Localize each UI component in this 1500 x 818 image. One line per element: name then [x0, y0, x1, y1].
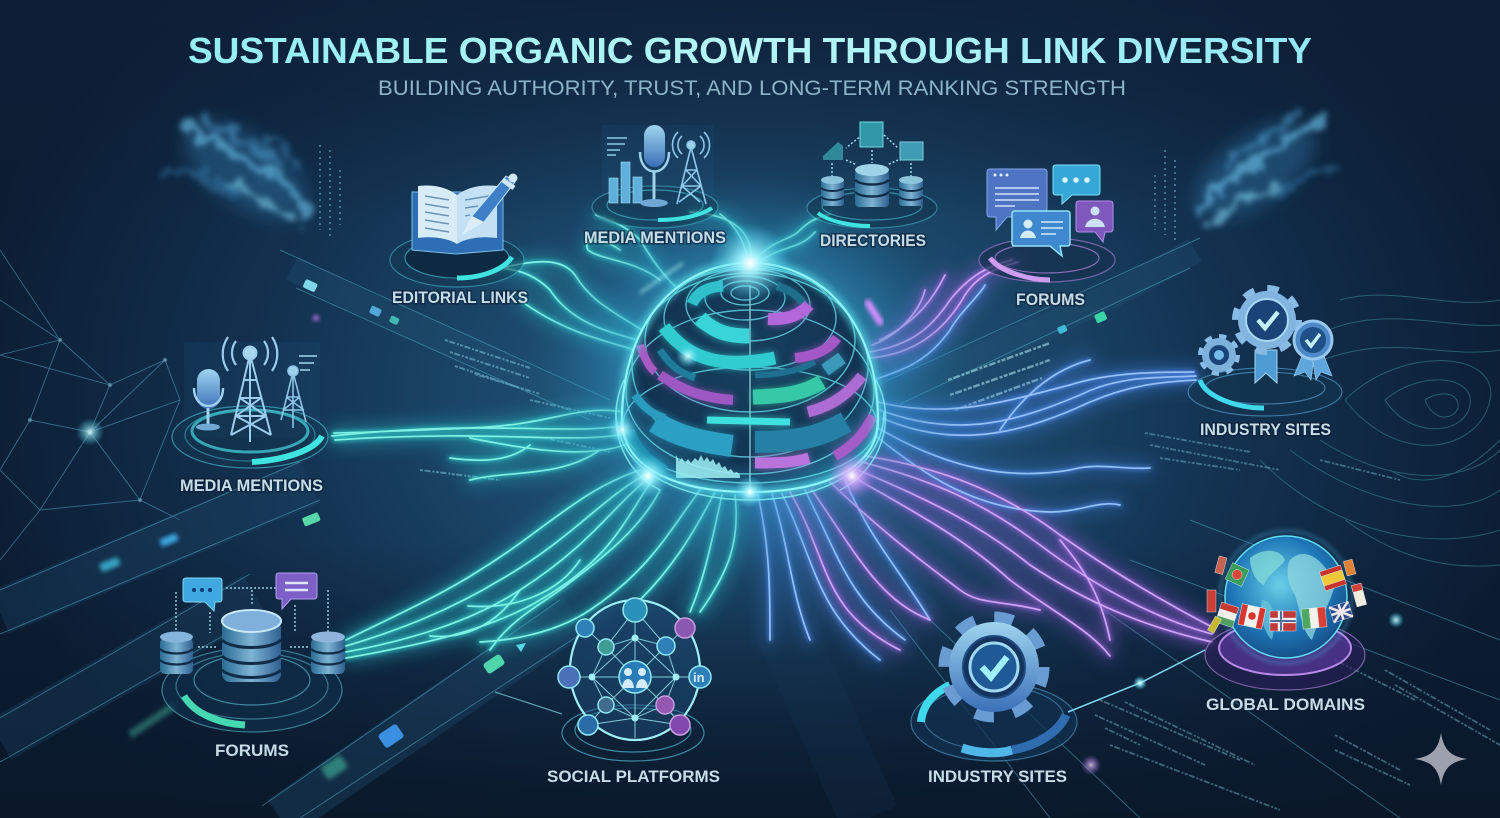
left side flare: [606, 414, 638, 446]
flag: uk: [1329, 601, 1353, 623]
label: INDUSTRY SITES: [928, 767, 1067, 786]
network hub glow: [76, 418, 104, 446]
sphere halo: [525, 175, 975, 575]
icon: small tower: [281, 366, 306, 428]
icon: purple bubble: [1076, 201, 1113, 242]
icon: database right: [899, 176, 923, 206]
node: social platforms: [547, 598, 720, 786]
node: media mentions top: [584, 125, 726, 247]
icon: bar chart: [609, 162, 642, 203]
icon: file tile: [860, 122, 883, 147]
highlight flare: [676, 344, 700, 368]
purple spark: [868, 303, 880, 322]
flag: left edge: [1207, 590, 1216, 612]
label: MEDIA MENTIONS: [180, 476, 323, 495]
network graph: left edge: [0, 250, 180, 560]
glow point: right: [1388, 612, 1404, 628]
icon: text lines: [607, 138, 627, 155]
flag: lower left: [1208, 616, 1222, 633]
node: industry sites bottom: [911, 620, 1077, 786]
latitude rings: [623, 266, 877, 492]
code text lines: right block: [948, 343, 1050, 410]
icon: microphone: [194, 369, 223, 430]
flag: norway: [1270, 611, 1296, 631]
icon: gear: [947, 620, 1041, 714]
node ring: [592, 186, 718, 228]
label: MEDIA MENTIONS: [584, 228, 726, 247]
node: industry sites right: [1188, 290, 1342, 439]
icon: profile bubble: [1012, 211, 1070, 256]
icon: database centre: [855, 164, 889, 207]
dotted connectors: [832, 135, 911, 176]
icon: text lines: [299, 356, 317, 370]
node ring: [162, 648, 342, 732]
node: media mentions left: [172, 337, 328, 495]
connector: gear to globe: [1068, 650, 1205, 712]
sphere panels glow: [630, 286, 873, 470]
node backdrop: [184, 342, 320, 437]
link tendrils: crisp strands: [332, 212, 1212, 660]
title: SUSTAINABLE ORGANIC GROWTH THROUGH LINK DIVERSITY: [188, 30, 1312, 71]
people icon: [622, 679, 648, 688]
sphere body: [622, 263, 878, 492]
dotted connectors: [176, 588, 328, 647]
icon: database left: [160, 632, 193, 674]
flag: italy: [1301, 607, 1327, 629]
link tendrils: wide glow: [332, 212, 1212, 660]
icon: database centre: [222, 610, 281, 682]
node: editorial links: [390, 174, 528, 307]
road bands: [0, 238, 1500, 818]
icon: big gear: [1237, 290, 1297, 350]
label: SOCIAL PLATFORMS: [547, 767, 720, 786]
icon: badge: [1294, 321, 1332, 359]
code text lines: left block: [420, 340, 610, 480]
icon: fountain pen: [462, 174, 518, 235]
globe: [1220, 531, 1352, 663]
node ring: [1188, 368, 1342, 416]
flag: upper right: [1343, 559, 1356, 576]
node: global domains: [1205, 531, 1367, 714]
data dots: right: [1155, 150, 1175, 240]
bottom node flare: [734, 476, 766, 508]
flag: upper left: [1215, 556, 1227, 574]
road markers: [99, 279, 1108, 780]
node ring: [979, 238, 1115, 282]
connector: road to social: [495, 692, 562, 714]
light ray: [640, 263, 683, 293]
link tendrils: soft halo: [332, 212, 1212, 660]
data dots: left: [320, 145, 340, 240]
flag: spain: [1319, 565, 1347, 591]
icon: cyan bubble: [1053, 165, 1100, 204]
node backdrop: [602, 125, 714, 205]
glow point: bottom: [1081, 755, 1101, 775]
node: directories: [807, 122, 937, 250]
sphere rim glow: [622, 263, 878, 492]
icon: main tower: [223, 337, 277, 442]
smoke cloud: top right: [1178, 102, 1335, 238]
node ring: [807, 188, 937, 228]
label: FORUMS: [1016, 290, 1085, 309]
node ring: [1205, 620, 1365, 690]
flags: [1207, 556, 1367, 633]
icon: microphone: [640, 125, 669, 207]
ribbons: badge: [1294, 356, 1332, 380]
icon: open book: [412, 185, 503, 254]
code text lines: lower right: [1095, 433, 1500, 810]
central data sphere: [544, 197, 958, 562]
sphere mini chart: [676, 455, 740, 478]
top light flare: [710, 223, 790, 303]
node ring: [172, 406, 328, 468]
flag: hungary: [1215, 602, 1239, 628]
network sphere: [569, 600, 700, 740]
right node flare: [828, 452, 876, 500]
icon: folder tile: [900, 142, 923, 160]
network nodes: [558, 598, 711, 735]
flag: canada: [1238, 604, 1266, 629]
icon: window bubble: [987, 169, 1047, 230]
smoke cloud: top left: [168, 102, 322, 238]
label: DIRECTORIES: [820, 231, 926, 250]
icon: purple bubble: [276, 573, 317, 609]
label: EDITORIAL LINKS: [392, 288, 528, 307]
icon: link tile: [823, 142, 843, 160]
subtitle: BUILDING AUTHORITY, TRUST, AND LONG-TERM RANKING STRENGTH: [378, 77, 1126, 100]
heads: [624, 668, 646, 676]
node ring: [390, 233, 524, 287]
sphere rim: [622, 263, 878, 492]
icon: small gear: [1201, 337, 1237, 373]
icon: radio tower: [672, 132, 710, 204]
label: FORUMS: [215, 741, 289, 760]
sphere base rings: [616, 380, 885, 500]
node: forums bottom: [160, 573, 345, 760]
flag: bangladesh: [1225, 563, 1249, 587]
flag: right edge: [1351, 583, 1367, 607]
icon: database left: [821, 176, 844, 206]
sphere data panels: [630, 286, 873, 470]
left node flare: [626, 454, 670, 498]
node: forums top: [979, 165, 1115, 309]
node ring: [562, 705, 704, 761]
node ring: [911, 683, 1077, 761]
watermark star: [1415, 733, 1467, 785]
topographic lines: right edge: [1260, 295, 1500, 566]
ribbon: big gear: [1255, 350, 1277, 383]
label: INDUSTRY SITES: [1200, 420, 1331, 439]
icon: cyan bubble: [183, 578, 222, 611]
linkedin mark: in: [693, 670, 705, 685]
icon: database right: [311, 632, 345, 674]
label: GLOBAL DOMAINS: [1206, 695, 1365, 714]
